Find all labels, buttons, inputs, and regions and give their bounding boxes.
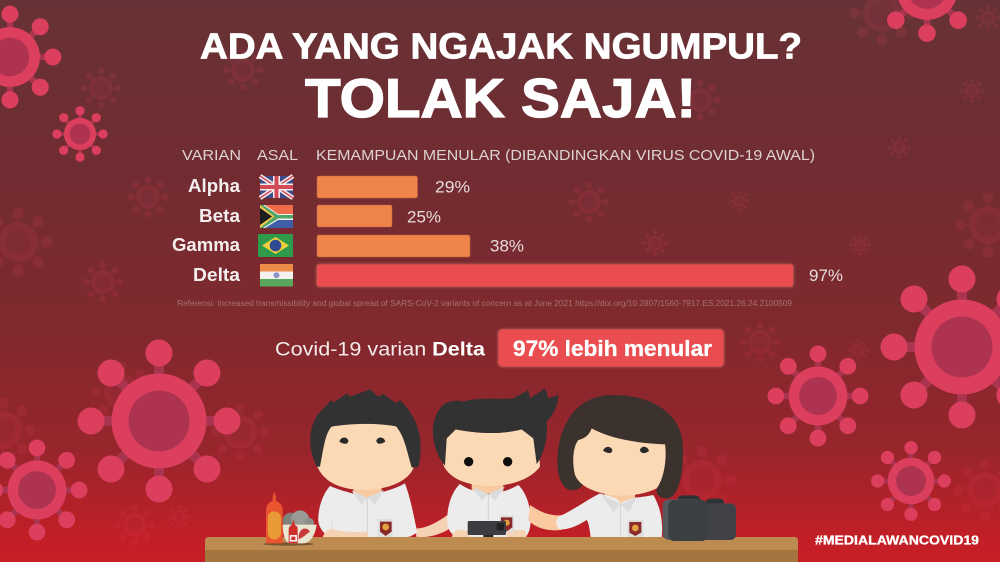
- table header: ASAL: [257, 147, 298, 164]
- icon: bags: [663, 495, 736, 541]
- bar: Alpha: [317, 176, 418, 198]
- bar chart: [317, 176, 793, 286]
- icon: food and sauces: [263, 492, 317, 546]
- callout text: Covid-19 varian Delta: [275, 338, 485, 360]
- icon: South Africa flag: [260, 205, 293, 228]
- bar: Gamma: [317, 235, 470, 257]
- illustration: three students at table: [205, 388, 798, 562]
- icon: India flag: [260, 264, 293, 286]
- reference note: Referensi: Increased transmissibility and global spread of SARS-CoV-2 variants of concern as at June 2021 https://doi.org/10.2807/1560-7917.ES.2021.26.24.2100509: [177, 299, 793, 308]
- callout badge text: 97% lebih menular: [513, 336, 712, 361]
- bar values: 38%: [490, 238, 524, 256]
- bar values: [407, 178, 843, 285]
- table header: VARIAN: [182, 147, 241, 164]
- table: [205, 537, 798, 562]
- bar: Beta: [317, 205, 392, 227]
- character: left boy: [310, 389, 450, 537]
- hashtag: #MEDIALAWANCOVID19: [815, 534, 979, 548]
- icon: UK flag: [260, 176, 293, 198]
- row labels: variants: Beta: [199, 206, 241, 226]
- row labels: variants: Alpha: [188, 176, 241, 196]
- bar values: 25%: [407, 208, 441, 226]
- callout: [275, 330, 724, 366]
- character: middle boy: [433, 388, 563, 537]
- icon: phone: [468, 521, 506, 537]
- bar: Delta: [317, 264, 793, 286]
- title line 1: ADA YANG NGAJAK NGUMPUL?: [200, 26, 802, 66]
- icon: Brazil flag: [258, 234, 293, 257]
- table header: KEMAMPUAN MENULAR (DIBANDINGKAN VIRUS COVID-19 AWAL): [316, 147, 815, 164]
- character: girl: [528, 395, 683, 537]
- bar values: 97%: [809, 267, 843, 285]
- row labels: variants: [172, 176, 241, 285]
- row labels: variants: Gamma: [172, 235, 241, 255]
- row labels: variants: Delta: [193, 265, 241, 285]
- callout badge: [498, 330, 724, 366]
- bar values: 29%: [435, 178, 470, 196]
- title line 2: TOLAK SAJA!: [305, 67, 696, 129]
- title: [200, 26, 802, 129]
